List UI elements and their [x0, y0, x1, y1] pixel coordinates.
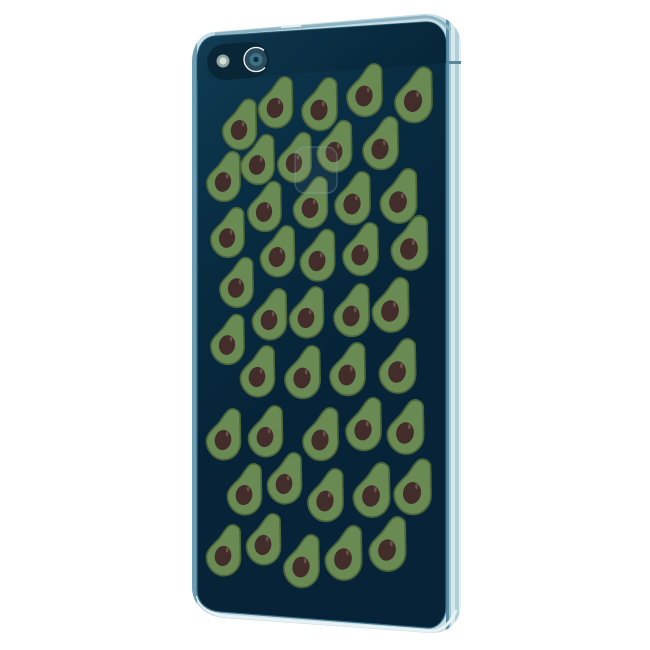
top glass band — [197, 22, 446, 81]
case top highlight — [215, 17, 450, 34]
flash — [216, 54, 230, 68]
fingerprint sensor — [295, 147, 337, 193]
phone back panel — [197, 22, 446, 628]
avocado pattern — [206, 64, 432, 587]
camera pill — [206, 41, 270, 81]
clear case outer shell — [185, 0, 470, 645]
camera module — [206, 41, 270, 81]
left rim — [192, 42, 197, 604]
side button seam — [447, 61, 461, 64]
right side edge stripes — [446, 0, 449, 640]
phone case product illustration — [192, 14, 461, 633]
case bottom highlight — [197, 596, 456, 631]
lens — [245, 48, 267, 70]
top button — [281, 24, 301, 28]
